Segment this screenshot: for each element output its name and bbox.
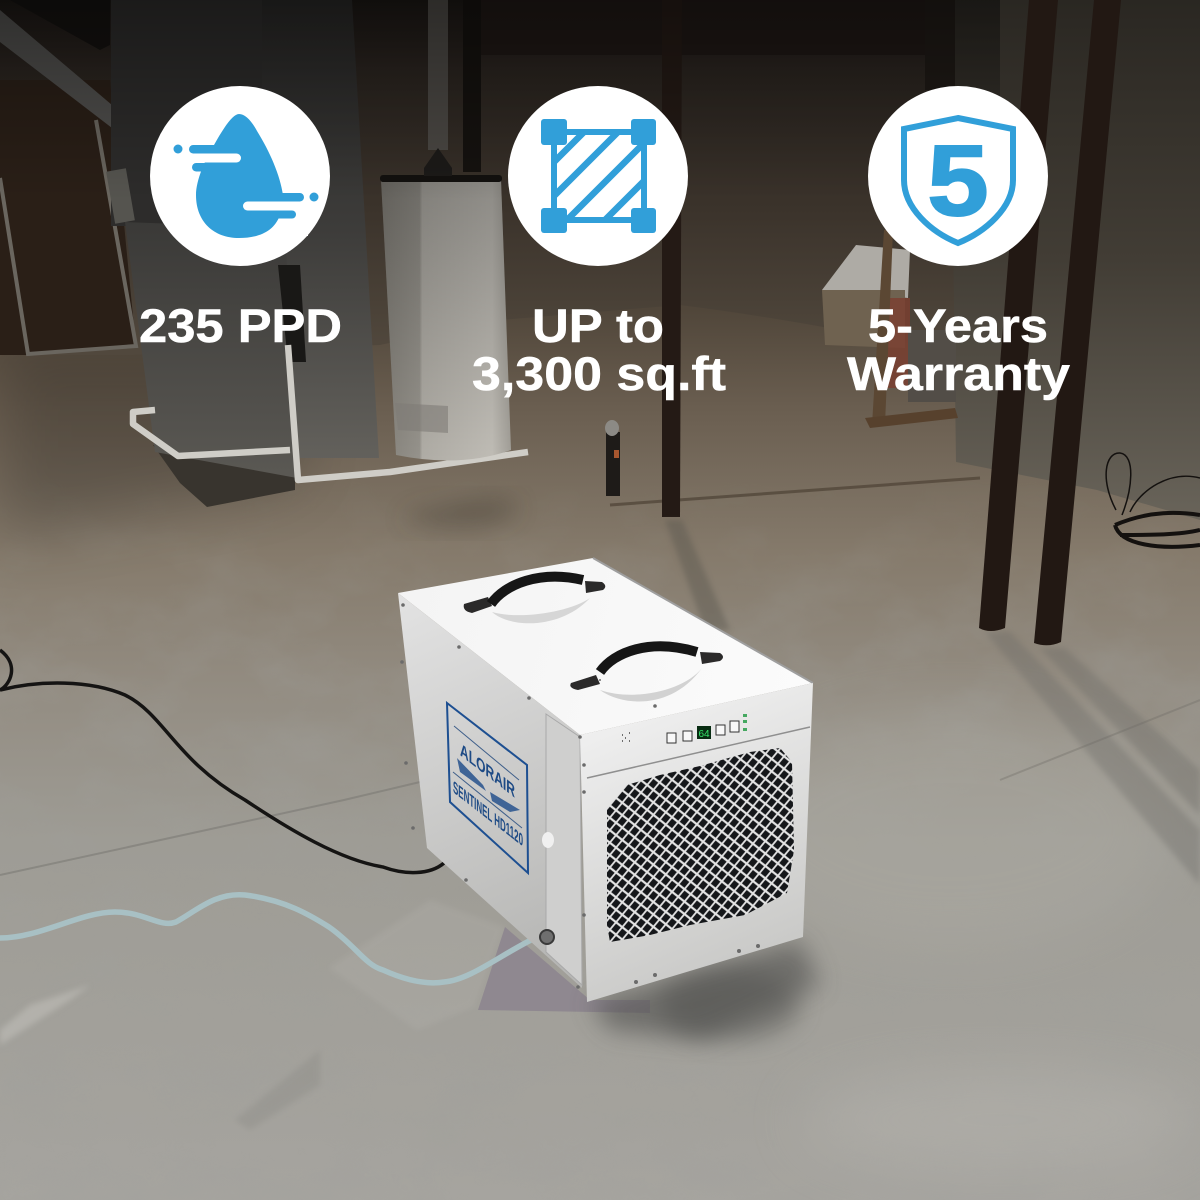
icon: shield 5: 5 bbox=[927, 126, 989, 237]
speaker holes bbox=[622, 733, 630, 741]
ceiling beam bbox=[0, 10, 112, 128]
center post shadow bbox=[665, 520, 730, 630]
side door panel bbox=[546, 714, 582, 985]
rear wall bbox=[0, 0, 1000, 355]
steel post left bbox=[979, 0, 1058, 631]
side knob bbox=[542, 832, 554, 848]
label text bbox=[453, 739, 523, 851]
side face bbox=[398, 593, 582, 988]
furnace base bbox=[153, 445, 295, 507]
top face bbox=[398, 558, 813, 735]
furnace plenum bbox=[111, 0, 264, 226]
brick band bbox=[480, 0, 960, 55]
control panel bbox=[667, 714, 747, 743]
post shadows bbox=[985, 632, 1200, 885]
burner hood bbox=[424, 148, 452, 176]
control panel: 64 bbox=[698, 729, 710, 740]
heater band bbox=[395, 403, 448, 433]
feature: 235 PPD bbox=[139, 86, 342, 353]
top shade bbox=[0, 0, 1000, 200]
label wings bbox=[457, 758, 520, 812]
label: 5-Years Warranty: Warranty bbox=[847, 348, 1071, 401]
water heater bbox=[381, 180, 511, 460]
label: 235 PPD: 235 PPD bbox=[139, 300, 342, 353]
water heater shade bbox=[381, 180, 511, 460]
icon: shield 5 bbox=[868, 86, 1048, 266]
wood stud bbox=[872, 230, 893, 425]
left storage room panel bbox=[0, 80, 136, 355]
product: dehumidifier bbox=[398, 558, 813, 1002]
front face bbox=[580, 683, 813, 1002]
white corner pipe bbox=[133, 345, 528, 480]
brand label: SENTINEL HD1120 bbox=[453, 777, 523, 851]
drain hose bbox=[0, 895, 535, 983]
vent pipe bbox=[605, 420, 620, 496]
icon: water drop bbox=[150, 86, 330, 266]
duct column bbox=[262, 0, 379, 458]
ceiling dark bbox=[10, 0, 110, 50]
steel column center bbox=[662, 0, 682, 517]
flue pipe bbox=[428, 0, 448, 150]
product shadow bbox=[590, 940, 820, 1040]
furnace cabinet bbox=[125, 222, 297, 478]
gas pipe bbox=[463, 0, 481, 172]
zebra bag bbox=[908, 330, 956, 402]
feature: coverage bbox=[472, 86, 726, 401]
label: 5-Years Warranty bbox=[847, 300, 1071, 401]
grille bbox=[607, 748, 794, 942]
white frame lines bbox=[0, 120, 136, 354]
label text: ALORAIR bbox=[460, 739, 515, 802]
floor bbox=[0, 300, 1200, 1200]
top edge bbox=[593, 558, 813, 683]
dark gap bbox=[278, 265, 306, 362]
floor texture bbox=[0, 400, 1200, 1200]
floor mottling bbox=[0, 340, 1200, 1170]
label: UP to 3,300 sq.ft bbox=[472, 300, 726, 401]
icon: area square bbox=[508, 86, 688, 266]
coiled cables bbox=[1106, 453, 1200, 547]
brand label bbox=[447, 703, 528, 873]
screws bbox=[400, 603, 760, 989]
label: UP to 3,300 sq.ft: UP to bbox=[532, 300, 664, 353]
dark top-wall column bbox=[925, 0, 955, 90]
drain fitting bbox=[540, 930, 554, 944]
label rules bbox=[453, 726, 522, 828]
side pipe bbox=[116, 170, 125, 222]
front seam bbox=[587, 727, 810, 778]
label: UP to 3,300 sq.ft: 3,300 sq.ft bbox=[472, 348, 726, 401]
handle 1 bbox=[464, 577, 605, 623]
wood base bbox=[865, 408, 958, 428]
right wall bbox=[950, 0, 1200, 520]
heater cap bbox=[380, 175, 502, 182]
feature: warranty bbox=[847, 86, 1071, 401]
box on floor bbox=[822, 245, 910, 388]
handle 2 bbox=[570, 646, 723, 701]
power cord bbox=[0, 650, 444, 873]
label: 5-Years Warranty: 5-Years bbox=[868, 300, 1048, 353]
steel post right bbox=[1034, 0, 1121, 645]
